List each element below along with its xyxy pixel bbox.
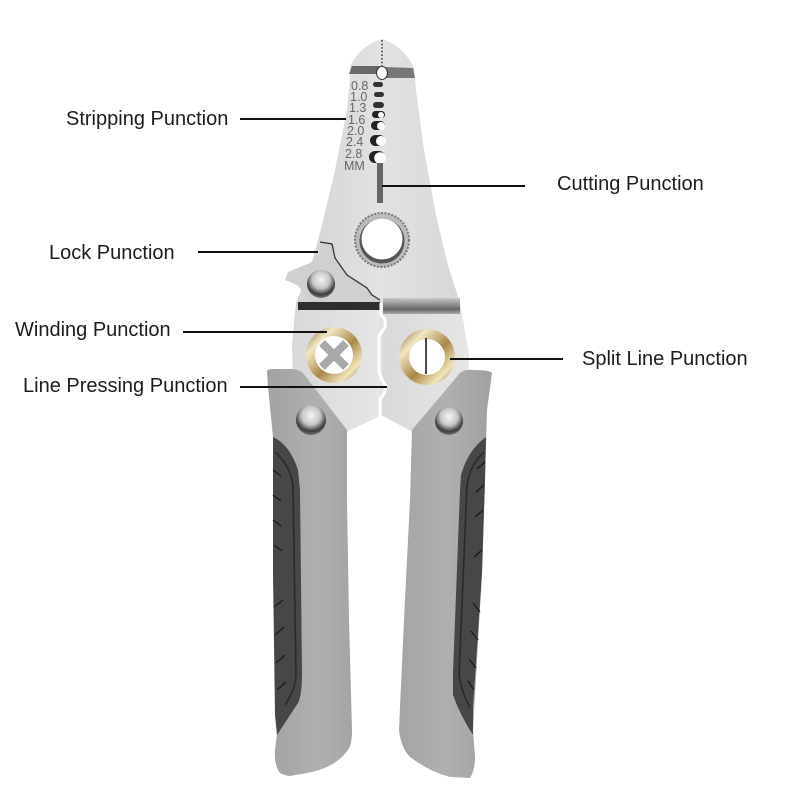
tip teeth — [381, 40, 383, 68]
gauge numbers: 2.0 — [347, 124, 364, 138]
center hole — [355, 213, 409, 267]
split line washer — [399, 329, 455, 385]
right handle rivet — [435, 407, 463, 435]
label: line pressing: Line Pressing Punction — [23, 375, 228, 397]
label: winding: Winding Punction — [15, 319, 171, 341]
lower plate left — [292, 303, 380, 432]
gauge numbers: 1.3 — [349, 101, 366, 115]
tip band left — [349, 66, 382, 74]
label: lock: Lock Punction — [49, 242, 175, 264]
stripping holes — [369, 66, 388, 164]
lower plate right — [383, 303, 469, 432]
gauge numbers: 1.0 — [350, 90, 367, 104]
gauge numbers: 2.8 — [345, 147, 362, 161]
left grip — [273, 437, 302, 735]
label: cutting: Cutting Punction — [557, 173, 704, 195]
left grip inner line — [275, 452, 296, 705]
lock lever edge — [320, 242, 380, 300]
center split — [379, 303, 386, 416]
lock lever — [285, 242, 380, 303]
gauge numbers: 0.8 — [351, 79, 368, 93]
winding washer — [306, 327, 362, 383]
gauge numbers — [344, 79, 368, 173]
left handle rivet — [296, 405, 326, 435]
gauge numbers: 1.6 — [348, 113, 365, 127]
right grip — [453, 437, 486, 735]
cutting slot — [377, 163, 383, 203]
label: split line: Split Line Punction — [582, 348, 748, 370]
right grip teeth — [468, 462, 485, 690]
right grip inner line — [459, 452, 484, 708]
band left — [298, 302, 380, 310]
gauge numbers: 2.4 — [346, 135, 363, 149]
left handle — [267, 369, 352, 776]
right handle — [399, 370, 492, 778]
band right — [383, 298, 460, 314]
tip band right — [385, 67, 415, 78]
left grip teeth — [273, 470, 286, 690]
lock rivet — [307, 270, 335, 298]
gauge numbers: MM — [344, 159, 365, 173]
upper blade — [292, 39, 469, 432]
pliers — [267, 39, 492, 778]
label: stripping: Stripping Punction — [66, 108, 228, 130]
